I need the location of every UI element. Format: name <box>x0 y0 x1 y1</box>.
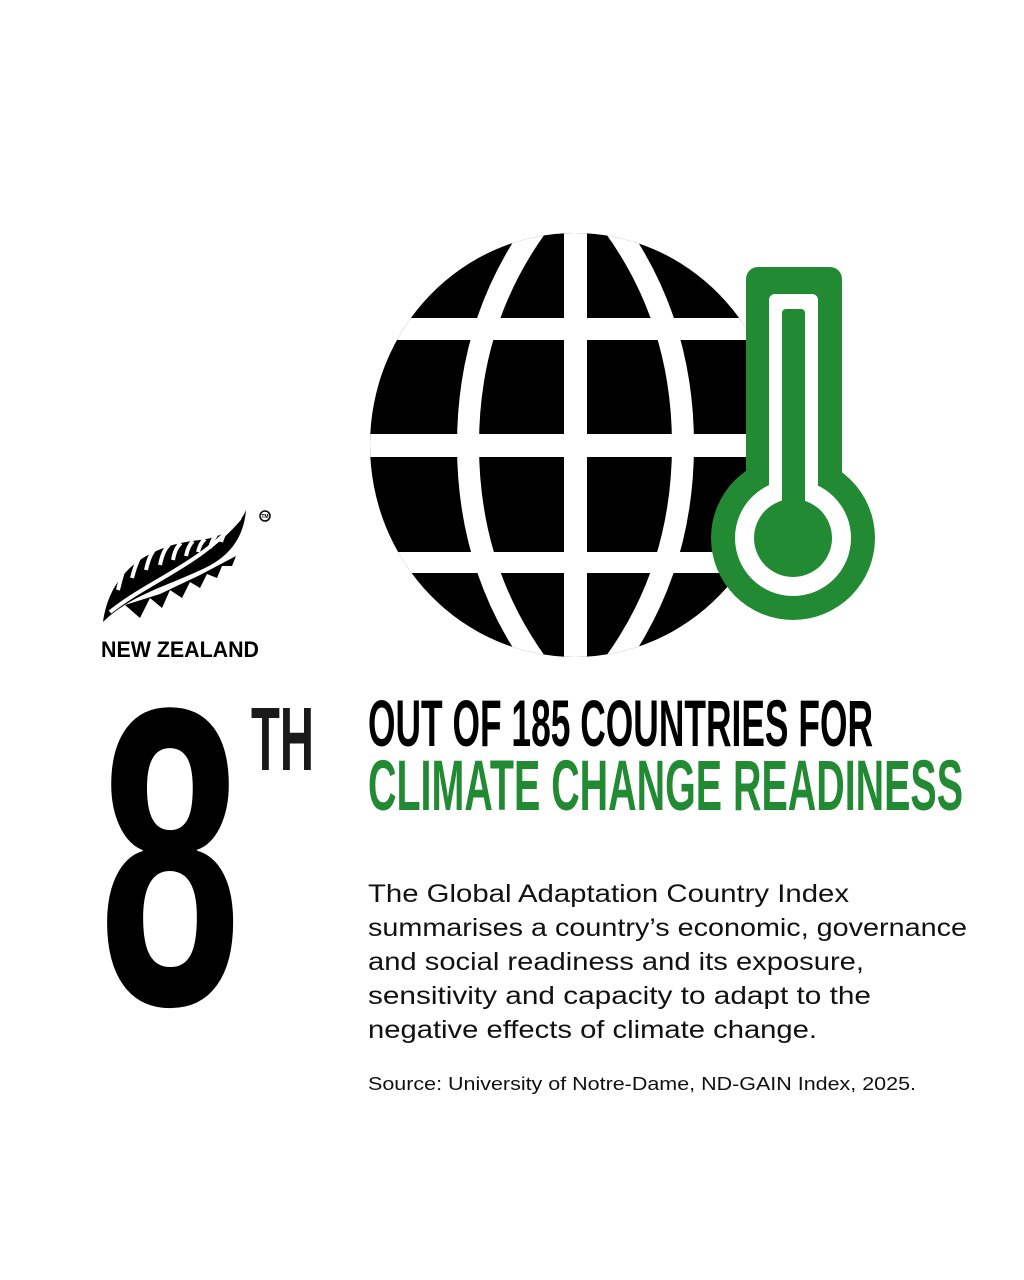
big rank number: TH <box>251 690 314 790</box>
body text: sensitivity and capacity to adapt to the <box>368 982 871 1010</box>
heading <box>368 686 963 826</box>
body text <box>368 880 967 1044</box>
logo: New Zealand fern: TM <box>261 514 269 520</box>
icon: globe <box>370 233 746 657</box>
big rank number: 8 <box>99 620 241 1095</box>
body text: negative effects of climate change. <box>368 1016 817 1044</box>
logo: New Zealand fern: NEW ZEALAND <box>101 637 259 662</box>
source: Source: University of Notre-Dame, ND-GAIN Index, 2025. <box>368 1074 916 1094</box>
icon: thermometer <box>711 267 875 620</box>
logo: New Zealand fern <box>101 510 270 662</box>
body text: summarises a country’s economic, governance <box>368 914 967 942</box>
body text: The Global Adaptation Country Index <box>368 880 850 908</box>
body text: and social readiness and its exposure, <box>368 948 864 976</box>
